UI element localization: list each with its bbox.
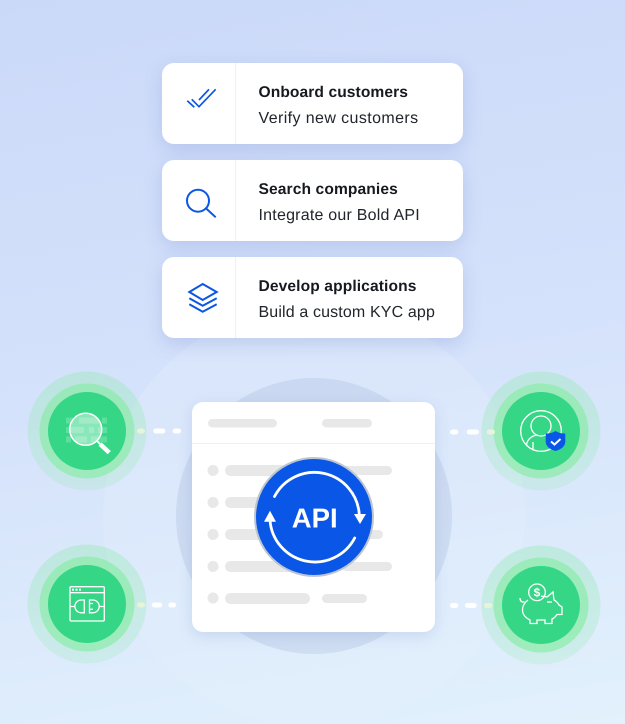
panel: table card (192, 402, 435, 632)
card: develop applications: Build a custom KYC app (258, 304, 435, 321)
icon group: piggy bank (482, 546, 600, 664)
icon: layers (188, 282, 219, 313)
text: search companies: Search companies (258, 180, 398, 198)
header rows (192, 419, 435, 604)
icon group: piggy bank: $ (534, 586, 541, 600)
card: search companies (162, 160, 463, 241)
icon group: verified user (482, 372, 600, 490)
text: onboard customers: Onboard customers (258, 84, 408, 100)
icon: double check (186, 88, 216, 108)
card: develop applications (162, 257, 463, 338)
text: API: API (292, 502, 338, 533)
card: onboard customers (162, 63, 463, 144)
icon group: search data (28, 372, 146, 490)
text: develop applications: Develop applications (258, 278, 416, 294)
card: onboard customers: Verify new customers (258, 110, 419, 127)
card: search companies: Integrate our Bold API (258, 207, 420, 224)
icon group: plug window (28, 544, 146, 664)
icon: magnifier (186, 188, 216, 218)
